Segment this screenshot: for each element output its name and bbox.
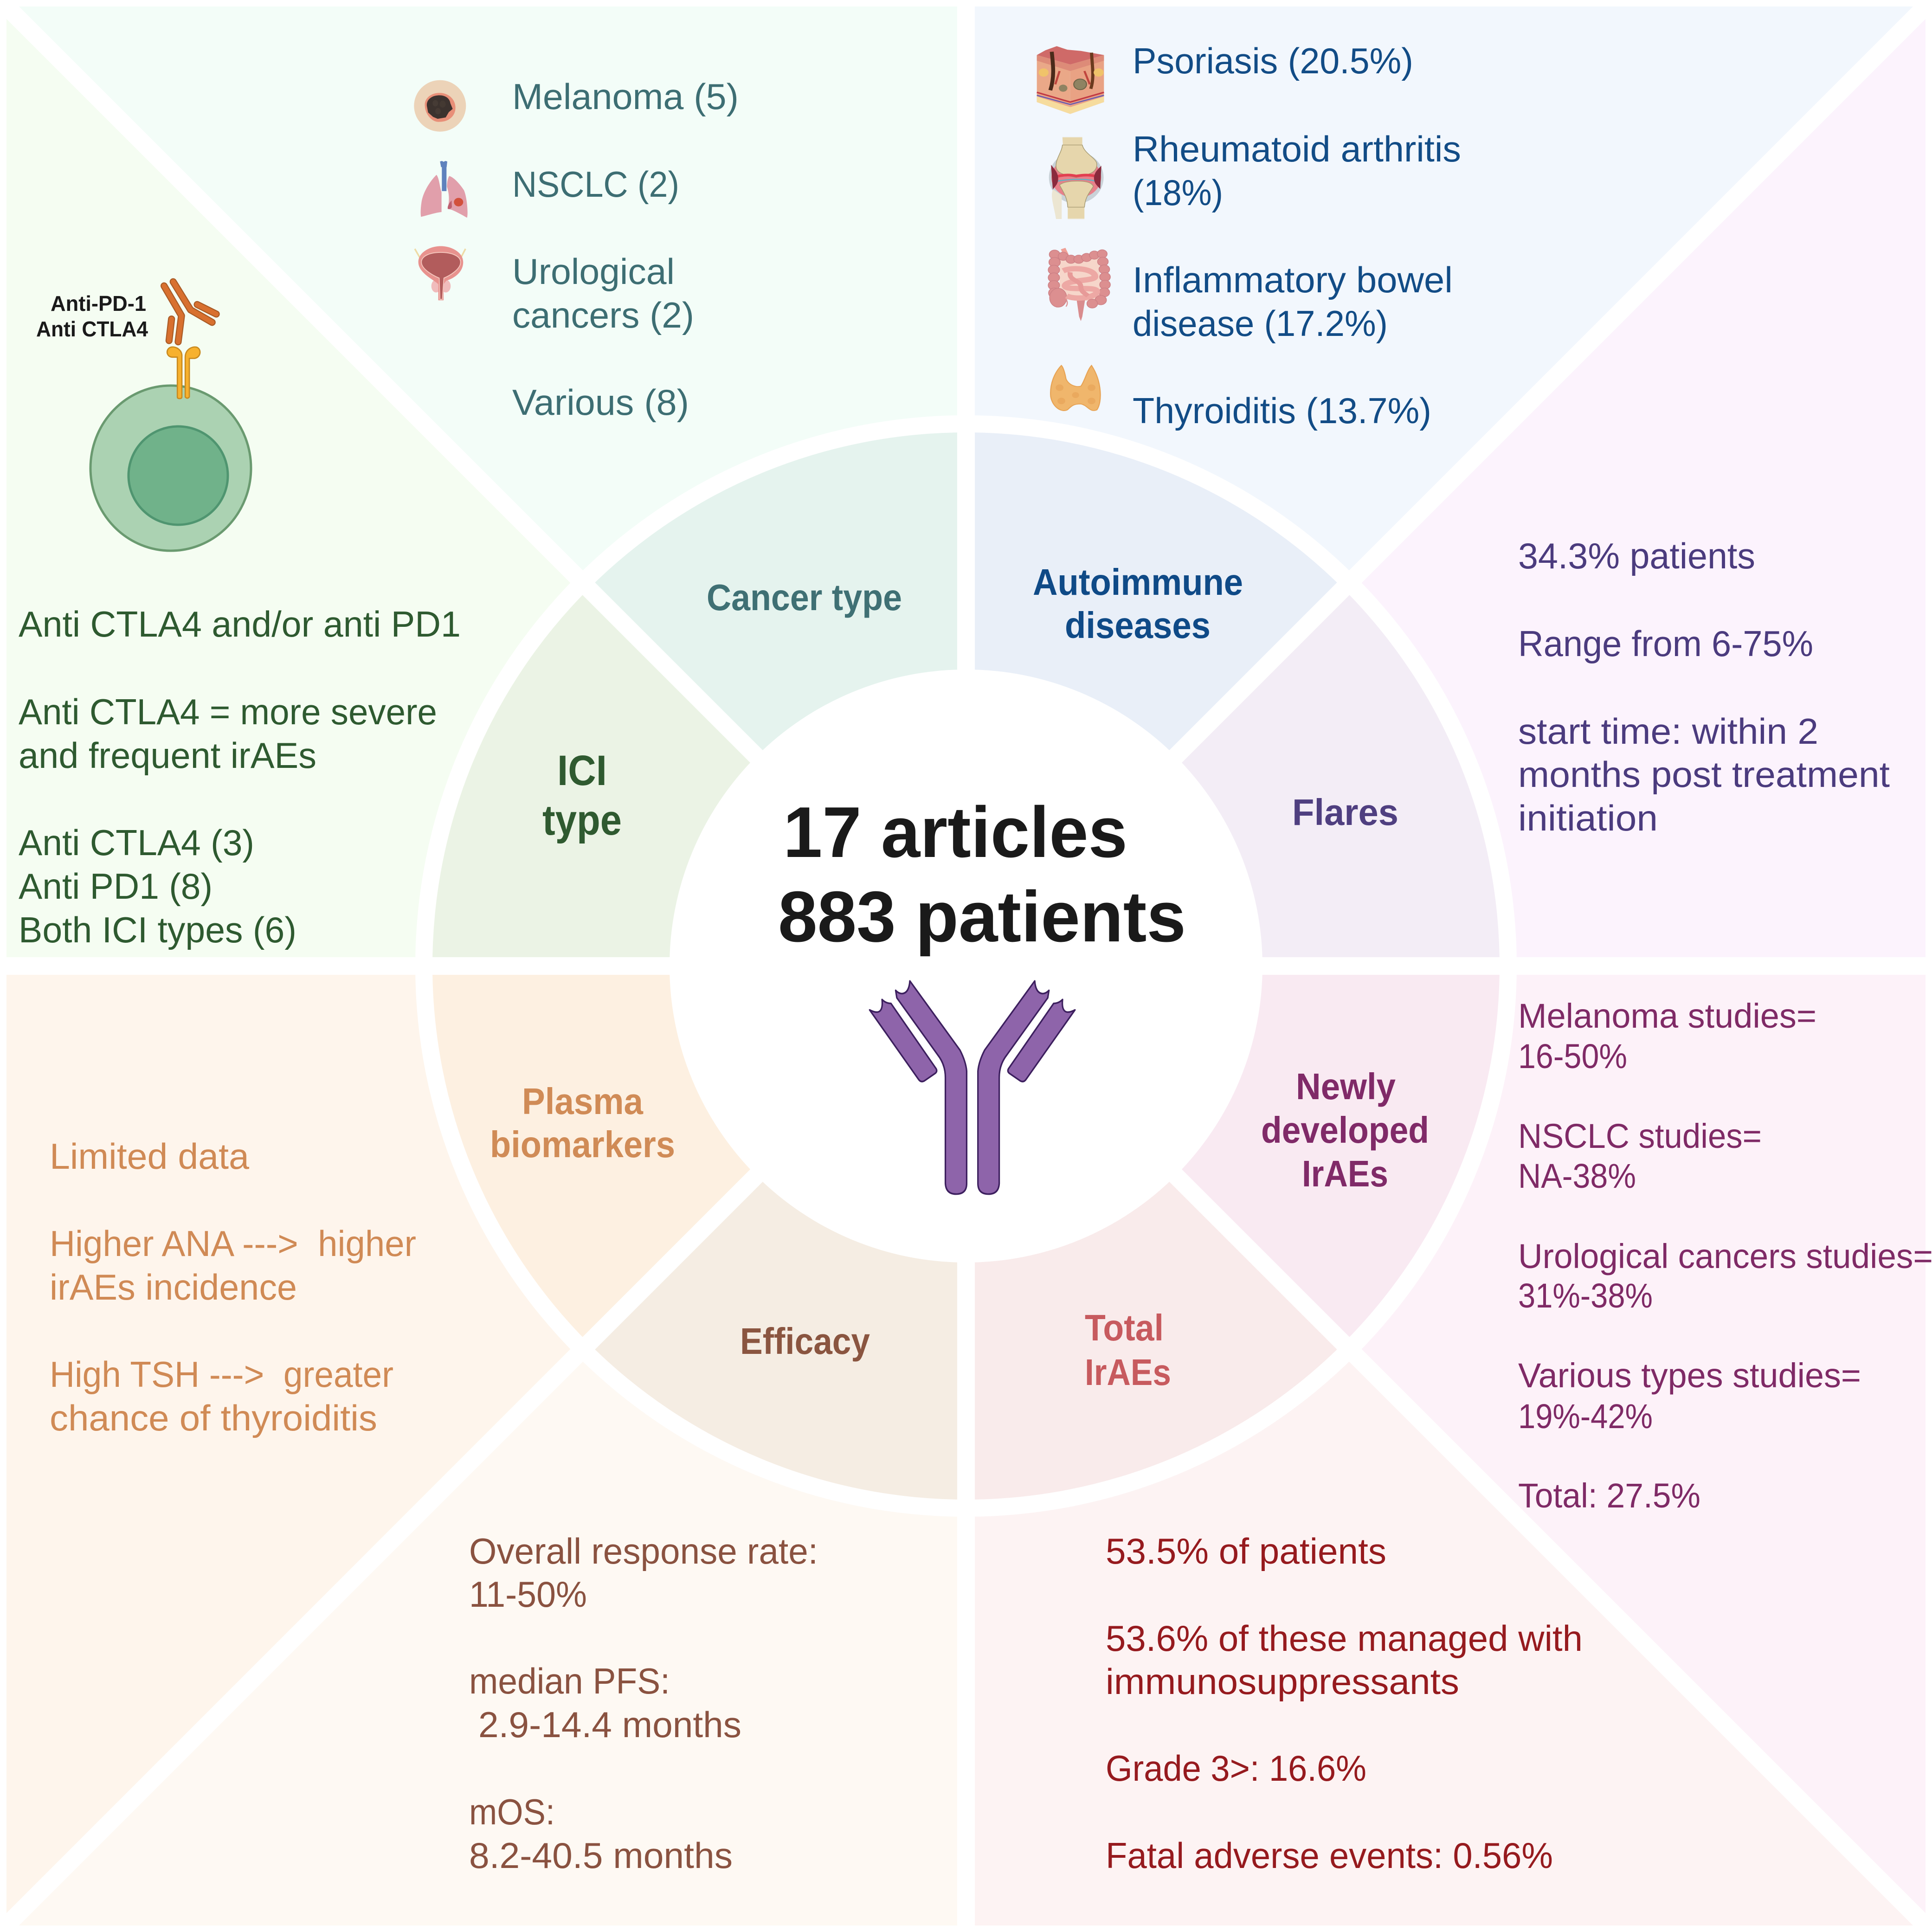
text: ICI details: Anti CTLA4 and/or anti PD1 bbox=[19, 604, 461, 644]
icon: skin bbox=[1037, 46, 1104, 114]
panel: cancer type details bbox=[414, 76, 739, 423]
panel: newly developed irAEs details: NA-38% bbox=[1518, 1157, 1636, 1195]
text: ICI details: and frequent irAEs bbox=[19, 735, 316, 776]
panel: efficacy details: 8.2-40.5 months bbox=[469, 1835, 733, 1876]
segment label: autoimmune diseases bbox=[1033, 561, 1243, 646]
segment label: total irAEs: IrAEs bbox=[1085, 1352, 1171, 1393]
panel: flares details: initiation bbox=[1518, 798, 1658, 838]
panel: total irAEs details: immunosuppressants bbox=[1106, 1661, 1459, 1702]
text: autoimmune disease list: disease (17.2%) bbox=[1133, 303, 1388, 344]
segment label: plasma biomarkers: Plasma bbox=[522, 1081, 643, 1122]
segment label: newly developed irAEs: IrAEs bbox=[1302, 1153, 1388, 1194]
segment label: ICI type: ICI bbox=[557, 747, 607, 794]
panel: plasma biomarkers details: Limited data bbox=[50, 1136, 250, 1177]
segment label: autoimmune diseases: Autoimmune bbox=[1033, 561, 1243, 603]
panel: efficacy details: median PFS: bbox=[469, 1661, 670, 1701]
segment label: ICI type: type bbox=[542, 797, 622, 844]
panel: ICI type details bbox=[19, 282, 461, 950]
text: cancer types: cancers (2) bbox=[512, 295, 694, 335]
panel: efficacy details: Overall response rate: bbox=[469, 1531, 818, 1571]
icon: bladder bbox=[415, 246, 465, 300]
panel: flares details: Range from 6-75% bbox=[1518, 623, 1813, 664]
icon: joint bbox=[1049, 137, 1104, 219]
panel: newly developed irAEs details: 16-50% bbox=[1518, 1037, 1627, 1075]
text: cancer types: Various (8) bbox=[512, 382, 689, 423]
panel: total irAEs details: Grade 3>: 16.6% bbox=[1106, 1748, 1366, 1789]
icon: melanoma bbox=[414, 80, 466, 132]
segment label: newly developed irAEs: developed bbox=[1261, 1109, 1429, 1151]
panel: total irAEs details bbox=[1106, 1531, 1583, 1876]
text: ICI details: Anti CTLA4 = more severe bbox=[19, 691, 437, 732]
text: autoimmune disease list bbox=[1133, 40, 1461, 431]
title: study totals bbox=[778, 792, 1186, 957]
icon: thyroid bbox=[1050, 366, 1101, 411]
panel: flares details: start time: within 2 bbox=[1518, 711, 1818, 752]
panel: newly developed irAEs details: 19%-42% bbox=[1518, 1397, 1653, 1436]
panel: plasma biomarkers details bbox=[50, 1136, 416, 1438]
segment label: total irAEs bbox=[1085, 1307, 1171, 1393]
panel: autoimmune diseases details bbox=[1037, 40, 1461, 431]
segment label: flares: Flares bbox=[1292, 792, 1398, 833]
text: ICI details bbox=[19, 604, 461, 950]
segment label: cancer type: Cancer type bbox=[707, 577, 902, 618]
panel: newly developed irAEs details: Melanoma studies= bbox=[1518, 997, 1816, 1035]
panel: plasma biomarkers details: irAEs incidence bbox=[50, 1267, 297, 1307]
panel: efficacy details: mOS: bbox=[469, 1791, 555, 1832]
segment label: plasma biomarkers bbox=[490, 1081, 675, 1165]
panel: newly developed irAEs details: Total: 27.5% bbox=[1518, 1476, 1700, 1515]
segment label: total irAEs: Total bbox=[1085, 1307, 1164, 1348]
panel: newly developed irAEs details: 31%-38% bbox=[1518, 1276, 1653, 1315]
icon: lungs bbox=[421, 161, 468, 218]
icon: T cell with receptor and antibody bbox=[36, 282, 251, 551]
icon: T cell with receptor and antibody: Anti-PD-1 bbox=[51, 291, 146, 316]
text: cancer types: Urological bbox=[512, 251, 675, 292]
panel: flares details: 34.3% patients bbox=[1518, 535, 1755, 576]
text: cancer types bbox=[512, 76, 739, 423]
segment label: newly developed irAEs: Newly bbox=[1296, 1066, 1396, 1107]
icon: T cell with receptor and antibody: Anti CTLA4 bbox=[36, 317, 148, 341]
panel: efficacy details: 11-50% bbox=[469, 1574, 587, 1615]
panel: efficacy details: 2.9-14.4 months bbox=[478, 1704, 741, 1745]
segment label: efficacy: Efficacy bbox=[740, 1320, 870, 1362]
panel: newly developed irAEs details bbox=[1518, 997, 1932, 1515]
title: study totals: 17 articles bbox=[783, 792, 1127, 872]
text: ICI details: Both ICI types (6) bbox=[19, 909, 296, 950]
panel: plasma biomarkers details: High TSH ---> greater bbox=[50, 1354, 393, 1395]
text: autoimmune disease list: Thyroiditis (13.7%) bbox=[1133, 390, 1431, 431]
text: ICI details: Anti CTLA4 (3) bbox=[19, 822, 254, 863]
panel: efficacy details bbox=[469, 1531, 818, 1876]
panel: flares details: months post treatment bbox=[1518, 754, 1890, 795]
panel: plasma biomarkers details: Higher ANA ---> higher bbox=[50, 1223, 416, 1264]
text: autoimmune disease list: (18%) bbox=[1133, 172, 1223, 213]
text: ICI details: Anti PD1 (8) bbox=[19, 866, 213, 907]
text: autoimmune disease list: Rheumatoid arthritis bbox=[1133, 129, 1461, 169]
text: cancer types: Melanoma (5) bbox=[512, 76, 739, 117]
text: autoimmune disease list: Inflammatory bowel bbox=[1133, 259, 1453, 300]
segment label: plasma biomarkers: biomarkers bbox=[490, 1124, 675, 1165]
panel: plasma biomarkers details: chance of thyroiditis bbox=[50, 1397, 377, 1438]
text: cancer types: NSCLC (2) bbox=[512, 164, 679, 205]
segment label: ICI type bbox=[542, 747, 622, 844]
segment label: autoimmune diseases: diseases bbox=[1065, 605, 1211, 646]
panel: newly developed irAEs details: Urological cancers studies= bbox=[1518, 1237, 1932, 1275]
icon: intestine bbox=[1048, 249, 1110, 321]
panel: flares details bbox=[1518, 535, 1890, 838]
segment label: newly developed irAEs bbox=[1261, 1066, 1429, 1194]
panel: total irAEs details: 53.6% of these managed with bbox=[1106, 1618, 1583, 1659]
panel: newly developed irAEs details: NSCLC studies= bbox=[1518, 1117, 1762, 1155]
text: autoimmune disease list: Psoriasis (20.5%) bbox=[1133, 40, 1413, 81]
icon: central antibody bbox=[869, 981, 1075, 1194]
panel: total irAEs details: Fatal adverse events: 0.56% bbox=[1106, 1835, 1553, 1876]
panel: total irAEs details: 53.5% of patients bbox=[1106, 1531, 1386, 1571]
panel: newly developed irAEs details: Various types studies= bbox=[1518, 1356, 1861, 1395]
title: study totals: 883 patients bbox=[778, 876, 1186, 957]
